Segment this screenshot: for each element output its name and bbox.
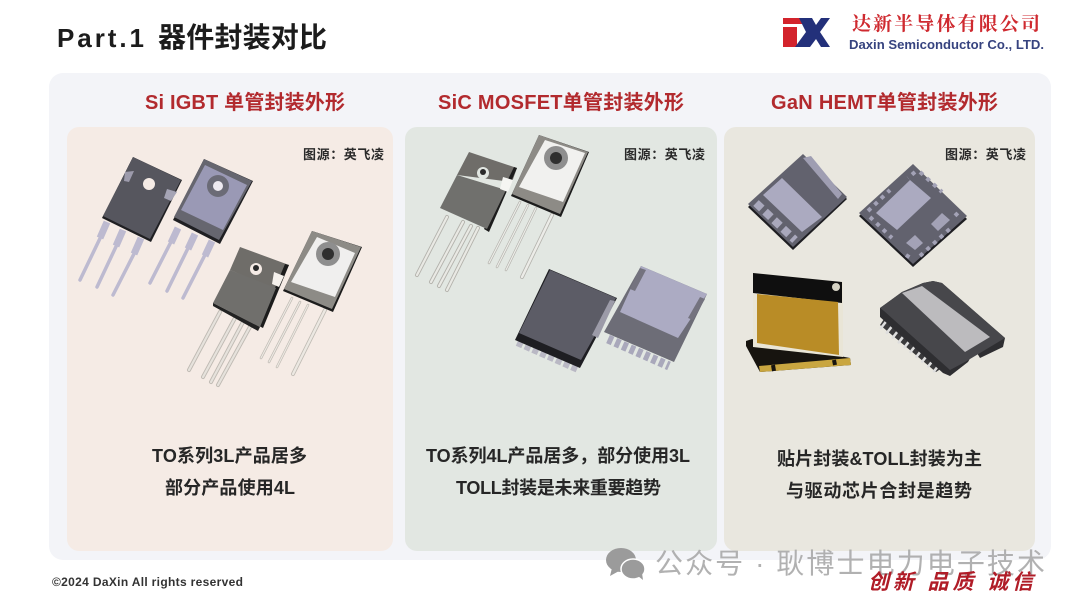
watermark text: 公众号 · 耿博士电力电子技术 (655, 548, 1045, 579)
caption: Si IGBT (152, 445, 307, 498)
caption: SiC MOSFET (426, 445, 690, 498)
image source: 图源：英飞凌 (945, 147, 1026, 162)
image source: 图源：英飞凌 (624, 147, 705, 162)
caption: GaN HEMT: 贴片封装&TOLL封装为主 (777, 449, 982, 469)
logo English name: Daxin Semiconductor Co., LTD. (849, 38, 1044, 52)
device: TO-247 4L back (489, 135, 589, 277)
footer: copyright: ©2024 DaXin All rights reserved (52, 575, 243, 589)
panel: background (49, 73, 1051, 560)
device: power IC (880, 281, 1005, 376)
device: TO-247 4L front (417, 152, 517, 290)
logo: Daxin Semiconductor (783, 13, 1044, 52)
caption: GaN HEMT: 与驱动芯片合封是趋势 (786, 480, 972, 501)
title: Part.1 (57, 23, 144, 53)
panel: Si IGBT (67, 91, 393, 551)
watermark (606, 548, 1045, 580)
icon: DX mark (783, 18, 830, 47)
panel: GaN HEMT (724, 91, 1035, 551)
device: gold die card (746, 273, 851, 372)
caption: Si IGBT: TO系列3L产品居多 (152, 445, 307, 466)
logo Chinese name: 达新半导体有限公司 (852, 13, 1040, 35)
title (57, 22, 327, 53)
device: TOLL back (604, 266, 707, 366)
device: TO-247 4L back (261, 231, 362, 374)
device: QFN multi pads (859, 164, 967, 267)
device: TO-247 3L front (80, 157, 182, 295)
title: 器件封装对比 (158, 22, 327, 53)
slogan: 创新 品质 诚信 (868, 571, 1036, 594)
caption: Si IGBT: 部分产品使用4L (165, 477, 295, 498)
icon: WeChat (606, 548, 645, 580)
device: QFN top pads (748, 154, 847, 250)
image source: 图源：英飞凌 (303, 147, 384, 162)
device: TO-247 3L back (150, 159, 253, 298)
caption: SiC MOSFET: TO系列4L产品居多，部分使用3L (426, 445, 690, 466)
panel 2 card (405, 127, 717, 551)
panel 3 card (724, 127, 1035, 551)
caption: GaN HEMT (777, 449, 982, 501)
panel 1 card (67, 127, 393, 551)
panel: SiC MOSFET (405, 91, 717, 551)
heading: Si IGBT: Si IGBT 单管封装外形 (145, 91, 345, 114)
caption: SiC MOSFET: TOLL封装是未来重要趋势 (456, 478, 661, 498)
device: TOLL front (515, 269, 617, 370)
device: TO-247 4L front (189, 247, 289, 385)
heading: GaN HEMT: GaN HEMT单管封装外形 (771, 91, 998, 114)
heading: SiC MOSFET: SiC MOSFET单管封装外形 (438, 91, 684, 114)
